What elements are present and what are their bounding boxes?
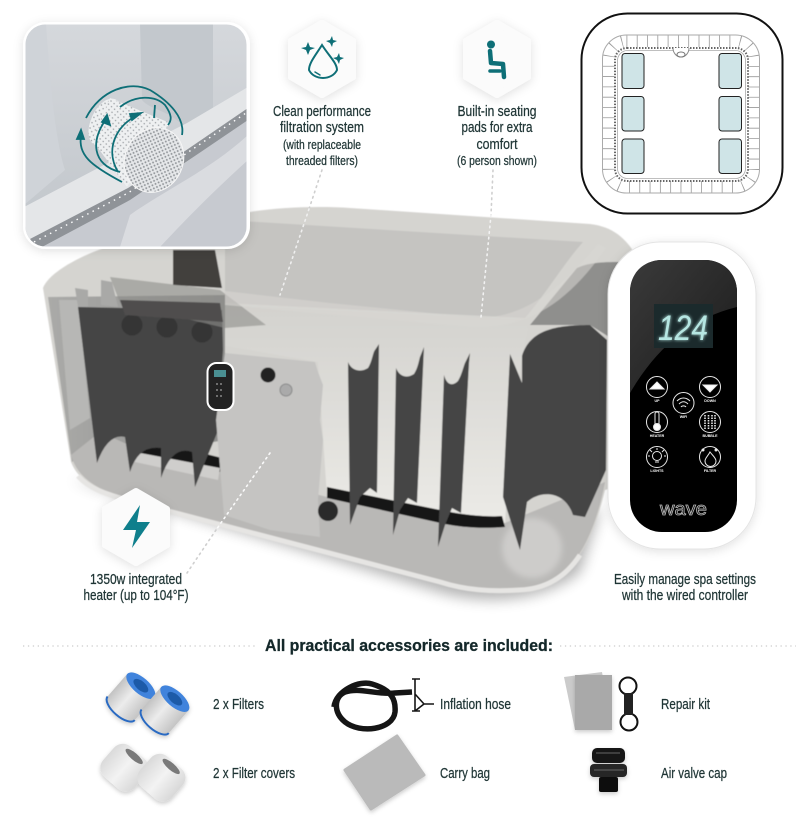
button labels: WIFI bbox=[680, 415, 687, 419]
heater valve bbox=[280, 384, 292, 396]
dotted divider left bbox=[23, 645, 257, 647]
hexagon icon: lightning bolt bbox=[105, 491, 167, 563]
notch port bbox=[677, 52, 685, 57]
label: filters: 2 x Filters bbox=[213, 696, 264, 713]
wave logo: wave bbox=[659, 499, 707, 519]
display bbox=[654, 304, 713, 348]
lower fabric bbox=[40, 118, 248, 247]
text: filtration system: filtration system bbox=[280, 119, 364, 136]
button labels: FILTER bbox=[704, 469, 717, 473]
rear dark block bbox=[173, 250, 222, 288]
text: filtration system: Clean performance bbox=[273, 103, 371, 120]
button labels: DOWN bbox=[704, 399, 716, 403]
left wall light stripe bbox=[59, 300, 90, 430]
text: controller caption: with the wired controller bbox=[621, 587, 748, 604]
button labels: UP bbox=[654, 399, 660, 403]
black base strip bbox=[327, 487, 505, 528]
tub ground shadow bbox=[70, 480, 600, 599]
display digits: 124 bbox=[658, 309, 708, 348]
right floor highlight bbox=[502, 518, 562, 578]
front baffle fin 1 bbox=[348, 344, 379, 525]
text: controller caption bbox=[614, 571, 756, 604]
right dark baffle panel bbox=[503, 325, 607, 550]
small rim baffle tips bbox=[75, 280, 118, 307]
leader line: seating bbox=[481, 170, 493, 317]
heater dial bbox=[260, 368, 276, 382]
face gloss bbox=[630, 260, 737, 393]
left black base strip bbox=[135, 444, 222, 472]
right grey inner wall bbox=[530, 262, 622, 345]
accessory: filter covers bbox=[95, 739, 190, 807]
label: air valve cap: Air valve cap bbox=[661, 765, 727, 782]
left front wall bbox=[48, 295, 225, 462]
text: heater: heater (up to 104°F) bbox=[84, 587, 188, 604]
left dark baffle panels bbox=[78, 307, 223, 487]
text: heater bbox=[84, 571, 188, 604]
outer ring ticks bbox=[608, 41, 754, 187]
front baffle fin 3 bbox=[438, 353, 470, 547]
hexagon icon: water drop with sparkles bbox=[291, 23, 353, 95]
filter notch bbox=[673, 48, 689, 57]
inner ring outline bbox=[618, 50, 746, 178]
seat layout diagram bbox=[582, 14, 782, 214]
text: seating pads: pads for extra bbox=[462, 119, 533, 136]
button labels bbox=[650, 399, 718, 473]
translucent rim fold bbox=[110, 277, 266, 328]
text: seating pads bbox=[457, 103, 537, 168]
baffle top scallops bbox=[122, 314, 212, 342]
button labels: BUBBLE bbox=[703, 434, 718, 438]
label: filter covers: 2 x Filter covers bbox=[213, 765, 295, 782]
label: repair kit: Repair kit bbox=[661, 696, 711, 713]
rotation arrows bbox=[77, 86, 182, 182]
air valve bbox=[318, 501, 338, 521]
accessory: air valve cap bbox=[590, 748, 627, 792]
controller body bbox=[608, 242, 756, 549]
fabric light fold bbox=[120, 135, 248, 247]
accessory: carry bag bbox=[345, 736, 424, 809]
repair patches bbox=[564, 672, 612, 730]
front rim band bbox=[225, 244, 606, 327]
accessory: repair kit bbox=[564, 672, 638, 730]
accessory: filters bbox=[102, 668, 194, 739]
text: controller caption: Easily manage spa settings bbox=[614, 571, 756, 588]
rubber tool bbox=[620, 678, 636, 694]
controller black face bbox=[630, 260, 737, 532]
heater unit bbox=[216, 353, 338, 537]
seating pads bbox=[622, 54, 742, 174]
band stitching bbox=[34, 113, 246, 242]
leader line: heater bbox=[187, 453, 270, 573]
stitched inner ring bbox=[615, 48, 748, 181]
spa tub cutaway bbox=[43, 207, 640, 592]
control buttons bbox=[646, 376, 720, 468]
text: heater: 1350w integrated bbox=[90, 571, 182, 588]
wall folds bbox=[26, 24, 60, 204]
button labels: LIGHTS bbox=[650, 469, 664, 473]
perforated band bbox=[28, 108, 248, 247]
left base light strip bbox=[135, 452, 220, 480]
label: inflation hose: Inflation hose bbox=[440, 696, 511, 713]
front baffle fin 2 bbox=[393, 347, 424, 535]
mesh filter bbox=[82, 93, 194, 202]
tub base floor bbox=[71, 432, 605, 591]
text: seating pads: (6 person shown) bbox=[457, 153, 537, 168]
back inner wall bbox=[225, 220, 583, 318]
text: filtration system: threaded filters) bbox=[286, 153, 358, 168]
outer ring outline bbox=[602, 35, 760, 193]
rim dark fold bbox=[120, 300, 223, 322]
floor fabric bbox=[24, 87, 248, 247]
tub outer shell bbox=[43, 207, 640, 592]
text: filtration system: (with replaceable bbox=[283, 137, 361, 152]
wired controller bbox=[608, 242, 756, 549]
filter photo inset bbox=[23, 22, 250, 249]
text: seating pads: Built-in seating bbox=[458, 103, 536, 120]
text: filtration system bbox=[273, 103, 371, 168]
button labels: HEATER bbox=[650, 434, 665, 438]
dotted divider right bbox=[560, 645, 796, 647]
photo wall bbox=[24, 24, 248, 247]
inner tub white area bbox=[222, 305, 530, 527]
base light edge bbox=[78, 476, 580, 591]
accessory: inflation hose bbox=[334, 679, 434, 729]
accessories heading: All practical accessories are included: bbox=[265, 636, 553, 655]
text: seating pads: comfort bbox=[476, 136, 518, 153]
mini controller bbox=[208, 363, 234, 410]
leader line: filtration bbox=[280, 170, 322, 295]
hexagon icon: seated person bbox=[466, 23, 528, 95]
label: carry bag: Carry bag bbox=[440, 765, 490, 782]
